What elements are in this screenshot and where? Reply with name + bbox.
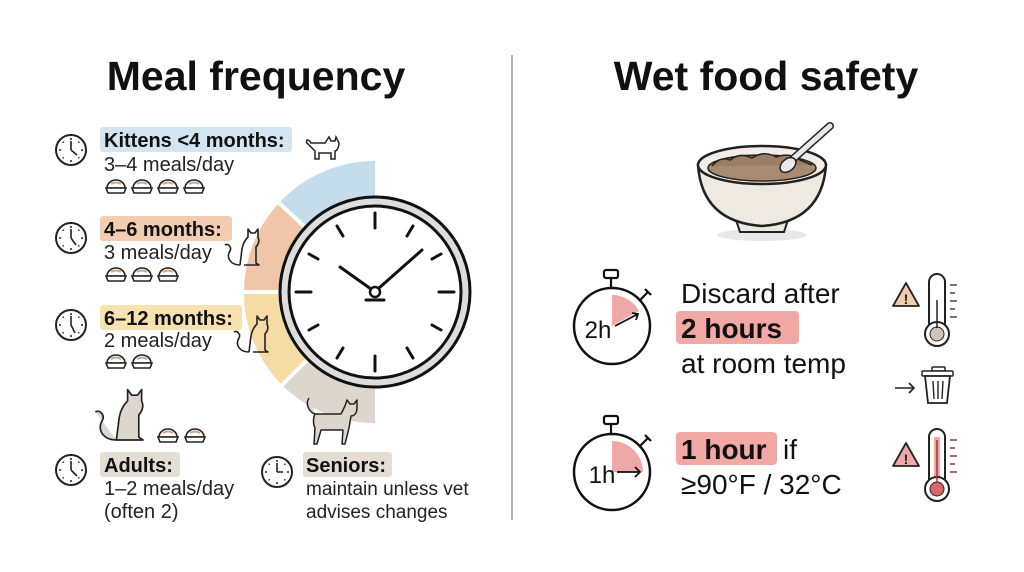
icon: senior cat walking	[307, 398, 357, 444]
title: meal frequency: Meal frequency	[107, 53, 405, 99]
text: discard after 2 hours: at room temp	[681, 348, 846, 379]
icon: cat 6-12	[234, 316, 268, 352]
row: kittens	[56, 127, 292, 193]
icon: stopwatch 1h: 1h	[589, 462, 615, 489]
text: discard after 2 hours: Discard after	[681, 278, 840, 309]
row: 6-12 months: 2 meals/day	[104, 330, 212, 352]
icon: stopwatch 2h: 2h	[585, 317, 611, 344]
row: kittens: 3–4 meals/day	[104, 154, 234, 176]
icon: warning + hot thermometer: !	[904, 451, 908, 467]
row: 6-12 months	[56, 305, 242, 368]
text: 1 hour if hot	[676, 432, 842, 500]
row: seniors	[262, 452, 469, 523]
icon: kitten	[306, 137, 339, 159]
icon: arrow to trash	[895, 367, 953, 403]
row: seniors: maintain unless vet	[306, 479, 469, 500]
row: 4-6 months: 4–6 months:	[104, 219, 222, 241]
row: seniors: Seniors:	[306, 455, 386, 477]
text: 1 hour if hot: 1 hour	[681, 434, 767, 465]
text: 1 hour if hot: if	[783, 434, 797, 465]
icon: adult cat with bowls	[95, 390, 205, 442]
row: adults: Adults:	[104, 455, 173, 477]
text: 1 hour if hot: ≥90°F / 32°C	[681, 469, 842, 500]
row: adults	[56, 452, 234, 523]
text: discard after 2 hours	[676, 278, 846, 379]
row: adults: 1–2 meals/day	[104, 478, 234, 500]
row: 4-6 months: 3 meals/day	[104, 242, 212, 264]
row: seniors: advises changes	[306, 502, 448, 523]
colored age arc ring	[244, 161, 375, 423]
icon: stopwatch 2h	[574, 270, 651, 364]
icon: cat 4-6	[225, 229, 259, 265]
row: kittens: Kittens <4 months:	[104, 130, 285, 152]
row: 4-6 months	[56, 216, 232, 281]
row: adults: (often 2)	[104, 501, 178, 523]
icon: stopwatch 1h	[574, 416, 651, 510]
icon: warning + hot thermometer	[893, 429, 957, 501]
icon: warning + thermometer: !	[904, 291, 908, 307]
title: wet food safety: Wet food safety	[614, 53, 918, 99]
row: 6-12 months: 6–12 months:	[104, 308, 233, 330]
icon: bowl of wet food	[698, 126, 830, 241]
big clock	[280, 197, 470, 387]
text: discard after 2 hours: 2 hours	[681, 313, 782, 344]
icon: warning + thermometer	[893, 274, 957, 346]
